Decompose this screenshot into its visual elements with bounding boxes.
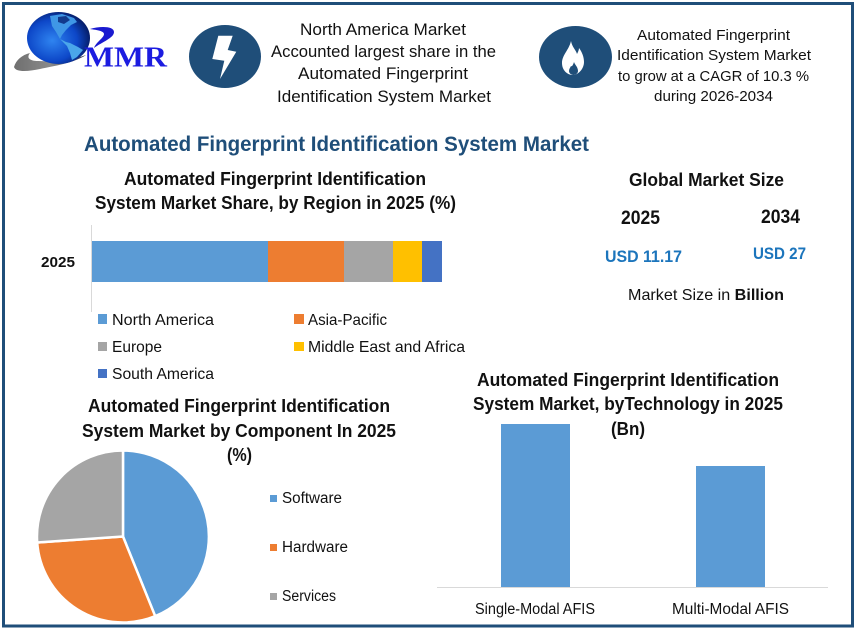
legend: regions: Asia-Pacific: [308, 312, 387, 329]
callout: CAGR: Automated Fingerprint: [637, 27, 791, 44]
bar chart: technology: [437, 424, 828, 618]
callout: North America: Identification System Market: [277, 88, 491, 106]
callout: North America: Accounted largest share in the: [271, 43, 496, 61]
axis labels: Single-Modal AFIS: [475, 601, 595, 618]
heading: share by region: System Market Share, by Region in 2025 (%): [95, 193, 456, 213]
icon: flame: [539, 26, 612, 88]
year 2034: 2034: [761, 207, 800, 228]
unit note: Market Size in Billion: [628, 287, 784, 304]
legend: components: Software: [282, 490, 342, 507]
legend: components: Hardware: [282, 539, 348, 556]
callout: North America: North America Market: [300, 21, 466, 39]
heading: by technology: Automated Fingerprint Identification: [477, 370, 779, 390]
heading: by technology: System Market, byTechnology in 2025: [473, 394, 783, 414]
callout: CAGR: during 2026-2034: [654, 88, 773, 105]
stacked bar chart: [41, 225, 442, 312]
title: Automated Fingerprint Identification System Market: [84, 133, 589, 156]
heading: by technology: [473, 370, 783, 439]
legend: regions: Middle East and Africa: [308, 339, 465, 356]
segments: [92, 241, 442, 282]
legend: components: Services: [282, 588, 336, 605]
panel: global market size: [605, 170, 806, 304]
logo: MMR globe: [14, 12, 168, 74]
heading: by technology: (Bn): [611, 419, 645, 439]
legend: regions: South America: [112, 366, 214, 383]
value 2025: USD 11.17: [605, 247, 682, 266]
heading: by component: [82, 396, 396, 465]
callout: CAGR: [617, 27, 812, 105]
bar: multi-modal: [696, 466, 765, 587]
year 2025: 2025: [621, 208, 660, 229]
heading: share by region: Automated Fingerprint Identification: [124, 169, 426, 189]
heading: by component: System Market by Component In 2025: [82, 421, 396, 441]
logo: MMR globe: MMR: [84, 42, 168, 74]
callout: CAGR: to grow at a CAGR of 10.3 %: [618, 68, 809, 85]
heading: share by region: [95, 169, 456, 213]
year label: 2025: [41, 254, 75, 271]
legend: regions: North America: [112, 312, 214, 329]
heading: by component: Automated Fingerprint Identification: [88, 396, 390, 416]
heading: by component: (%): [227, 445, 252, 465]
legend: components: [270, 490, 348, 605]
callout: North America: [271, 21, 496, 106]
axis labels: Multi-Modal AFIS: [672, 601, 789, 618]
value 2034: USD 27: [753, 244, 806, 263]
callout: CAGR: Identification System Market: [617, 47, 812, 64]
bar: single-modal: [501, 424, 570, 587]
callout: North America: Automated Fingerprint: [298, 65, 468, 83]
axis labels: [475, 601, 789, 618]
heading: Global Market Size: [629, 170, 784, 190]
pie chart: [37, 450, 209, 622]
icon: lightning bolt: [189, 25, 261, 88]
legend: regions: [98, 312, 465, 383]
legend: regions: Europe: [112, 339, 162, 356]
